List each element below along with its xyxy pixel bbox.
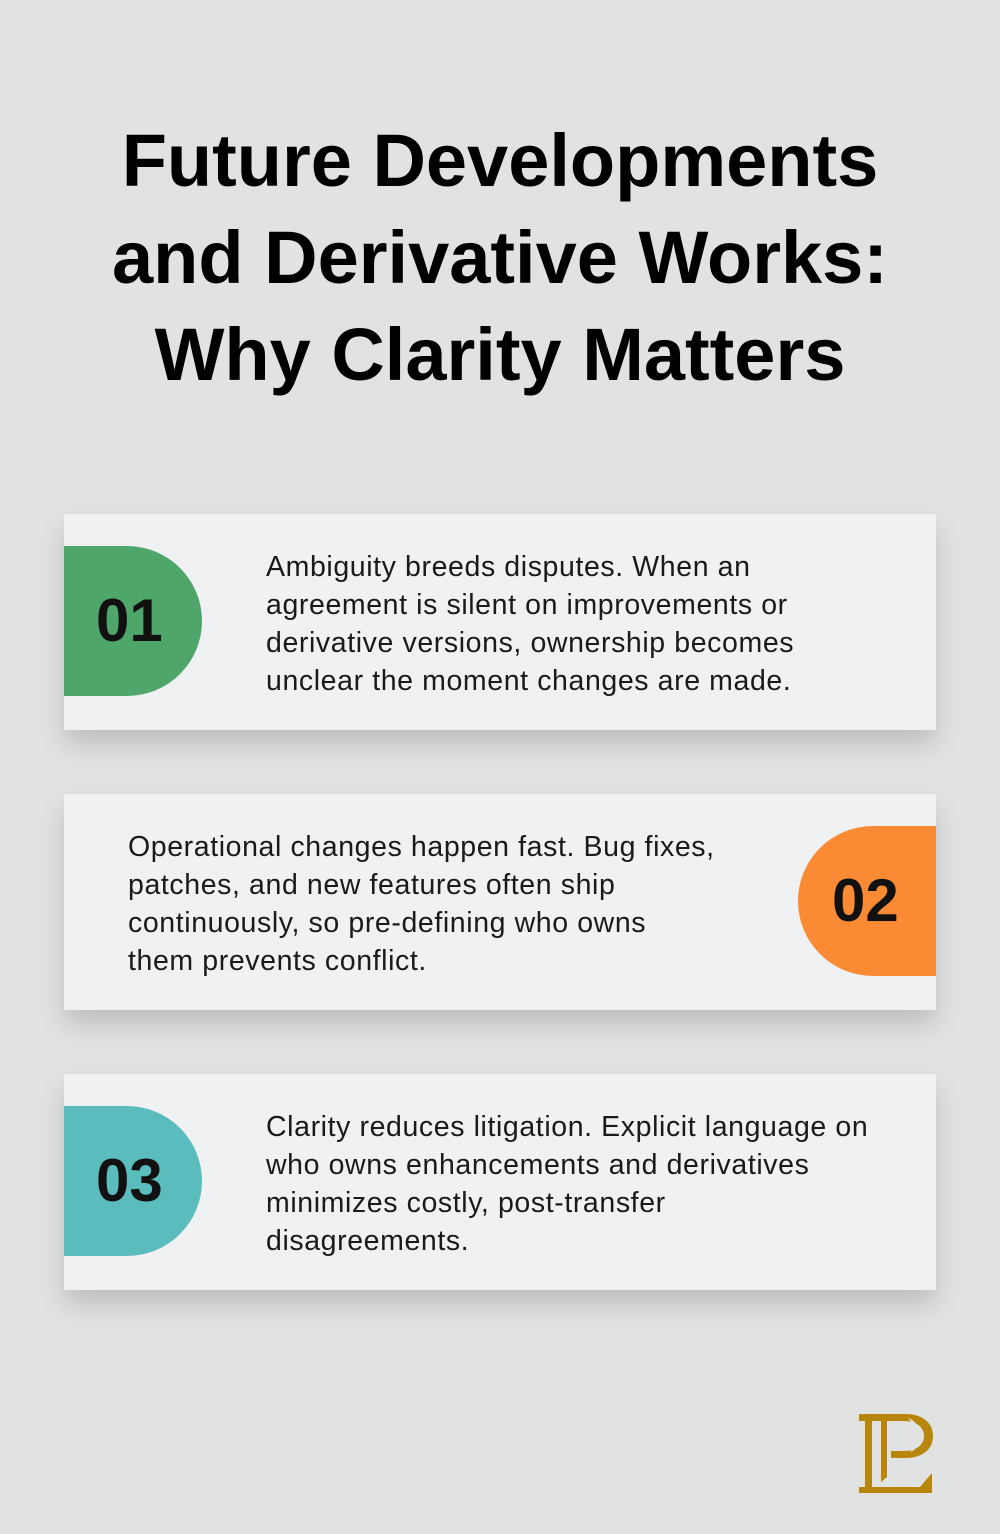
text 03: minimizes costly, post-transfer (266, 1187, 666, 1219)
text 02 (128, 831, 715, 977)
text 01: Ambiguity breeds disputes. When an (266, 551, 751, 583)
title: and Derivative Works: (112, 216, 888, 299)
panel: card 01 (64, 514, 936, 730)
icon: logo (859, 1414, 933, 1493)
text 02: Operational changes happen fast. Bug fixes, (128, 831, 715, 863)
text 02: them prevents conflict. (128, 945, 427, 977)
badge 01 (64, 546, 202, 696)
badge 03 (64, 1106, 202, 1256)
badge 02: 02 (832, 867, 899, 934)
panel: card 02 (64, 794, 936, 1010)
text 02: continuously, so pre-defining who owns (128, 907, 646, 939)
text 01: agreement is silent on improvements or (266, 589, 788, 621)
badge 03: 03 (96, 1147, 163, 1214)
text 03 (266, 1111, 868, 1257)
title: Future Developments (122, 119, 878, 202)
text 03: who owns enhancements and derivatives (266, 1149, 809, 1181)
title: Why Clarity Matters (155, 313, 845, 396)
panel: card 03 (64, 1074, 936, 1290)
text 03: Clarity reduces litigation. Explicit language on (266, 1111, 868, 1143)
text 01 (266, 551, 794, 697)
title (112, 119, 888, 396)
badge 01: 01 (96, 587, 163, 654)
text 01: unclear the moment changes are made. (266, 665, 791, 697)
text 02: patches, and new features often ship (128, 869, 615, 901)
text 03: disagreements. (266, 1225, 469, 1257)
badge 02 (798, 826, 936, 976)
text 01: derivative versions, ownership becomes (266, 627, 794, 659)
